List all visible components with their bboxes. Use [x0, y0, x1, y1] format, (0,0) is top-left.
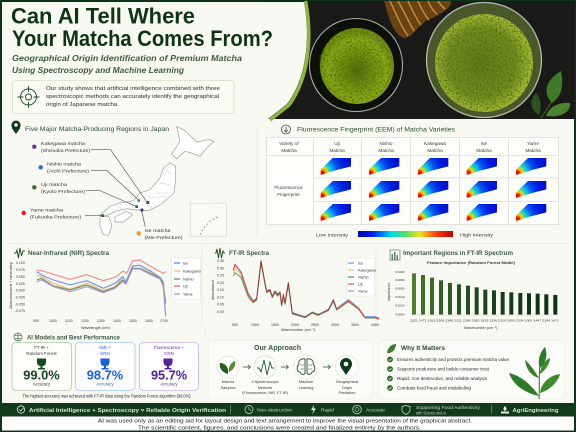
- icon: leaf: [387, 344, 396, 353]
- callout: study summary: [12, 80, 234, 114]
- NIR chart: 1100: [65, 319, 73, 323]
- heading: fluorescence: Fluorescence Fingerprint (EEM) of Matcha Varieties: [297, 126, 455, 134]
- feature importance bars: [411, 273, 559, 315]
- table labels: Yame: [527, 141, 539, 146]
- bar chart axes: 0.0000: [395, 312, 405, 316]
- NIR chart: -0.050: [15, 302, 25, 306]
- NIR chart: Absorbance / Intensity: [9, 262, 13, 309]
- badge: supporting food authenticity: with Science and AI: [416, 410, 446, 416]
- icon: tea bowl: [426, 2, 542, 118]
- banner headline: Artificial Intelligence + Spectroscopy = Reliable Origin Verification: [29, 408, 226, 414]
- table labels: Kakegawa: [424, 141, 446, 146]
- benefit list: [387, 357, 510, 391]
- FT-IR legend: Ise: [358, 262, 363, 266]
- NIR chart: 1700: [160, 319, 168, 323]
- bar chart axes: 0.0040: [395, 295, 405, 299]
- icon: AI brain: [14, 333, 22, 341]
- badge: non-destructive: [245, 406, 292, 414]
- NIR chart: 0.000: [16, 288, 25, 292]
- footer disclaimer: The scientific content, figures, and conclusions were created and finalized entirely by the authors.: [138, 426, 421, 432]
- icon: target: [18, 86, 40, 108]
- step: geographical origin prediction: [336, 356, 358, 395]
- icon: fluorescence: [282, 125, 290, 134]
- subtitle: Geographical Origin Identification of Premium Matcha: [12, 54, 242, 63]
- NIR legend: Nishio: [183, 278, 194, 282]
- bar chart axes: Importance: [387, 283, 391, 301]
- table labels: Variety of: [279, 141, 299, 146]
- icon: map pin: [12, 120, 20, 134]
- NIR chart: 0.100: [16, 261, 25, 265]
- table labels: Matcha: [281, 148, 297, 153]
- NIR chart: 1300: [97, 319, 105, 323]
- title: Can AI Tell Where: [11, 4, 195, 28]
- NIR chart: 1200: [81, 319, 89, 323]
- step: spectroscopic methods: [242, 356, 289, 395]
- heading: approach: Our Approach: [254, 345, 301, 352]
- NIR chart: 1400: [113, 319, 121, 323]
- FT-IR chart: Absorbance: [211, 280, 215, 300]
- panel: our approach: [208, 340, 372, 399]
- marker: Kakegawa: [32, 141, 90, 154]
- icon: powder bowl: [310, 18, 402, 112]
- banner: conclusion: [0, 403, 576, 416]
- marker: Kakegawa: (Shizuoka Prefecture): [41, 148, 90, 154]
- FT-IR chart: 500: [232, 323, 238, 327]
- step: geographical origin prediction: Geographical: [336, 380, 358, 384]
- inset box islands: [190, 203, 226, 236]
- icon: FT-IR wave: [215, 248, 225, 258]
- table labels: Nishio: [379, 141, 393, 146]
- chart title: Feature Importance (Random Forest Model): [427, 260, 516, 265]
- arrow: [281, 365, 288, 369]
- step: machine learning: [294, 355, 318, 390]
- EEM table: [267, 137, 559, 225]
- summary text: [46, 86, 220, 108]
- marker: Kakegawa: Kakegawa matcha: [41, 141, 85, 147]
- benefit list: Rapid, non-destructive, and reliable analysis: [397, 376, 487, 381]
- NIR chart: 1500: [129, 319, 137, 323]
- panel: NIR spectra: [9, 248, 202, 330]
- marker: Ise: (Mie Prefecture): [144, 235, 183, 241]
- icon: check circle: [17, 406, 25, 413]
- footer disclaimer: [2, 416, 574, 432]
- step: spectroscopic methods: 3 Spectroscopic: [251, 380, 279, 384]
- icon: tea plant: [509, 347, 560, 399]
- step: matcha samples: Matcha: [222, 380, 235, 384]
- table labels: Matcha: [427, 148, 443, 153]
- bar chart axes: Wavenumber (cm⁻¹): [464, 326, 497, 330]
- panel: important regions: [387, 250, 559, 330]
- card: NIR + KNN: [76, 342, 135, 390]
- heading: why: Why It Matters: [401, 346, 446, 352]
- footer disclaimer: AI was used only as an editing aid for layout design and text arrangement to improve the visual presentation of the graphical abstract.: [98, 418, 472, 424]
- FT-IR chart: 1500: [271, 323, 279, 327]
- badge: accurate: Accurate: [366, 408, 385, 412]
- FT-IR chart: Wavenumber (cm⁻¹): [281, 328, 316, 332]
- header white title area: [2, 2, 307, 119]
- NIR chart: [9, 260, 168, 330]
- FT-IR chart: [211, 259, 379, 332]
- NIR chart: 900: [33, 319, 39, 323]
- FT-IR chart: 3000: [331, 323, 339, 327]
- FT-IR chart: 0.10: [217, 296, 224, 300]
- badge: AgriEngineering: [501, 406, 559, 414]
- FT-IR legend: Kakegawa: [358, 268, 377, 272]
- summary text: Our study shows that artificial intelligence combined with three: [46, 86, 220, 92]
- FT-IR chart: 2000: [291, 323, 299, 327]
- FT-IR legend: Yame: [358, 290, 368, 294]
- marker: Ise: [136, 228, 183, 241]
- marker: Uji: [32, 182, 85, 195]
- panel: map of Japan: [12, 120, 226, 241]
- benefit list: Combats food fraud and mislabeling: [397, 386, 472, 390]
- benefit list: Supports producers and builds consumer trust: [397, 366, 490, 372]
- table labels: Matcha: [525, 148, 541, 153]
- bar chart axes: 0.0100: [395, 270, 405, 274]
- card: NIR + KNN: NIR +: [99, 345, 111, 350]
- table labels: Matcha: [378, 148, 394, 153]
- FT-IR chart: 0.00: [217, 310, 224, 314]
- bar chart axes: [387, 270, 559, 330]
- NIR legend: Yame: [183, 292, 193, 296]
- card: NIR + KNN: 98.7%: [87, 368, 123, 382]
- marker: Nishio: [38, 162, 89, 174]
- marker: Uji: (Kyoto Prefecture): [41, 189, 85, 195]
- card: FT-IR + Random Forest: 99.0%: [23, 368, 60, 382]
- marker: Yame: (Fukuoka Prefecture): [30, 214, 81, 220]
- badge: supporting food authenticity: [402, 405, 481, 416]
- NIR chart: 1000: [49, 319, 57, 323]
- badge: accurate: [353, 405, 385, 414]
- title: [11, 4, 273, 51]
- step: matcha samples: [217, 356, 239, 390]
- NIR legend: Uji: [183, 284, 188, 288]
- leader lines and markers: [85, 150, 149, 227]
- FT-IR legend: Uji: [358, 282, 363, 286]
- panel: fluorescence fingerprint: [267, 125, 559, 238]
- step: geographical origin prediction: Prediction: [339, 391, 355, 395]
- summary text: spectroscopic methods can accurately identify the geographical: [46, 94, 219, 100]
- heading: important regions: Important Regions in FT-IR Spectrum: [403, 250, 513, 257]
- FT-IR legend: [346, 258, 377, 296]
- NIR chart: -0.025: [15, 296, 25, 300]
- badge: AgriEngineering: AgriEngineering: [512, 408, 559, 414]
- bar chart axes: 2321 1471 1916 2300 2340 2311 2289 2360 1829 2326 2319 1990 2334 1002 1447 2354 1471: [410, 318, 559, 322]
- table labels: Fingerprint: [277, 192, 300, 197]
- table labels: Ise: [481, 141, 488, 146]
- map outline: [100, 126, 226, 236]
- FT-IR chart: 3500: [351, 323, 359, 327]
- table labels: Matcha: [329, 148, 345, 153]
- title: Your Matcha Comes From?: [12, 26, 273, 51]
- badge: non-destructive: Non-destructive: [257, 408, 292, 412]
- colour scale legend: [316, 231, 494, 238]
- NIR legend: Kakegawa: [183, 270, 202, 274]
- step: spectroscopic methods: (Fluorescence, NIR, FT-IR): [242, 391, 289, 395]
- colour scale legend: High Intensity: [460, 232, 494, 238]
- curved green stroke: [270, 1, 309, 120]
- FT-IR legend: Nishio: [358, 276, 369, 280]
- NIR chart: 1600: [145, 319, 153, 323]
- FT-IR chart: 0.05: [217, 302, 224, 306]
- FT-IR chart: 0.35: [217, 259, 224, 263]
- card: Fluorescence + CNN: CNN: [164, 351, 174, 356]
- badge: supporting food authenticity: Supporting Food Authenticity: [416, 405, 481, 410]
- table labels: Matcha: [476, 148, 492, 153]
- marker: Yame: Yame matcha: [30, 208, 63, 214]
- dividers: [6, 128, 570, 338]
- step: machine learning: Learning: [299, 386, 313, 390]
- badge: rapid: Rapid: [321, 408, 334, 412]
- badge: rapid: [311, 405, 334, 414]
- icon: NIR wave: [14, 248, 25, 258]
- card: FT-IR + Random Forest: Accuracy: [33, 382, 51, 386]
- FT-IR chart: 4000: [371, 323, 379, 327]
- header photo: matcha bowls: [262, 1, 575, 119]
- FT-IR chart: 0.20: [217, 281, 224, 285]
- colour scale legend: Low Intensity: [316, 232, 349, 238]
- icon: green leaves: [531, 71, 570, 118]
- heading: NIR: Near-Infrared (NIR) Spectra: [28, 250, 109, 257]
- panel: why it matters: [378, 340, 565, 399]
- card: Fluorescence + CNN: Fluorescence +: [154, 345, 185, 350]
- card: FT-IR + Random Forest: [12, 342, 72, 390]
- arrow: [243, 365, 250, 369]
- FT-IR chart: 0.15: [217, 288, 224, 292]
- step: matcha samples: Samples: [221, 386, 235, 390]
- step: machine learning: Machine: [299, 380, 313, 384]
- NIR chart: 0.050: [16, 275, 25, 279]
- heading: FT-IR: FT-IR Spectra: [229, 250, 269, 257]
- FT-IR chart: 0.25: [217, 274, 224, 278]
- NIR legend: [172, 258, 202, 299]
- FT-IR chart: 2500: [311, 323, 319, 327]
- subtitle: [12, 54, 242, 75]
- card: NIR + KNN: KNN: [100, 351, 110, 356]
- NIR chart: -0.075: [15, 309, 25, 313]
- card: Fluorescence + CNN: 95.7%: [151, 368, 187, 382]
- table labels: Fluorescence: [274, 185, 303, 190]
- FT-IR chart: 0.30: [217, 266, 224, 270]
- summary text: origin of Japanese matcha.: [46, 102, 119, 108]
- card: FT-IR + Random Forest: FT-IR +: [34, 345, 49, 350]
- icon: bamboo whisk: [384, 1, 451, 38]
- bar chart axes: 0.0060: [395, 286, 405, 290]
- heading: regions: Five Major Matcha-Producing Regions in Japan: [25, 126, 170, 133]
- FT-IR chart: 1000: [251, 323, 259, 327]
- step: geographical origin prediction: Origin: [342, 386, 352, 390]
- card: Fluorescence + CNN: [140, 342, 198, 390]
- benefit list: Ensures authenticity and protects premium matcha value: [397, 357, 510, 362]
- card: Fluorescence + CNN: Accuracy: [160, 382, 179, 386]
- bar chart axes: 0.0080: [395, 278, 405, 282]
- marker: Ise: Ise matcha: [144, 228, 171, 234]
- marker: Nishio: (Aichi Prefecture): [47, 168, 89, 174]
- marker: Yame: [22, 208, 81, 220]
- marker: Nishio: Nishio matcha: [47, 162, 81, 168]
- NIR chart: 0.075: [16, 268, 25, 272]
- heading: AI models: AI Models and Best Performance: [27, 334, 120, 342]
- table labels: Uji: [334, 141, 340, 146]
- subtitle: Using Spectroscopy and Machine Learning: [12, 66, 184, 75]
- table labels: [274, 141, 541, 197]
- panel: AI models and best performance: [12, 333, 198, 398]
- NIR legend: Ise: [183, 262, 188, 266]
- card: NIR + KNN: Accuracy: [96, 382, 115, 386]
- note on highest accuracy: The highest accuracy was achieved with FT-IR data using the Random Forest algorithm (99.0%).: [22, 394, 192, 398]
- panel: FT-IR spectra: [211, 248, 379, 332]
- step: spectroscopic methods: Methods: [258, 386, 272, 390]
- marker: Uji: Uji matcha: [41, 182, 67, 188]
- card: FT-IR + Random Forest: Random Forest: [26, 351, 57, 356]
- bar chart axes: 0.0020: [395, 304, 405, 308]
- arrow: [323, 365, 330, 369]
- NIR chart: 0.025: [16, 282, 25, 286]
- NIR chart: Wavelength (nm): [81, 326, 111, 330]
- icon: bar chart: [390, 250, 400, 260]
